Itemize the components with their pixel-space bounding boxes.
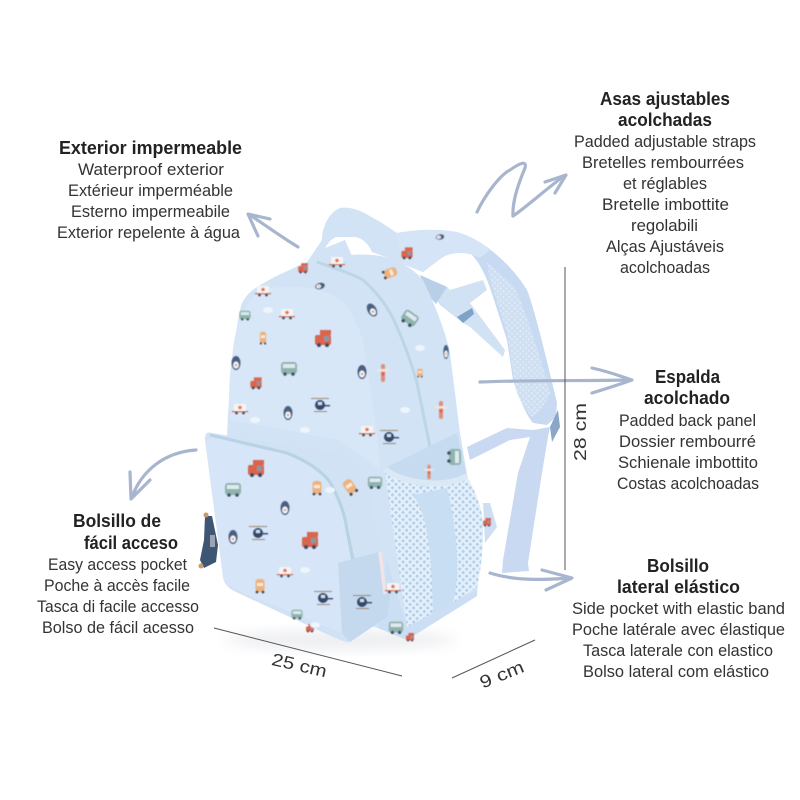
main zipper xyxy=(317,262,430,447)
text block: padded back: Dossier rembourré xyxy=(619,433,756,451)
text block: elastic side pocket: lateral elástico xyxy=(617,577,740,597)
text block: waterproof exterior: Waterproof exterior xyxy=(78,161,225,179)
arrow: exterior xyxy=(248,214,298,247)
dimension: height 28 cm: 28 cm xyxy=(570,403,590,461)
text block: waterproof exterior: Esterno impermeabile xyxy=(71,203,230,221)
bottom side panel xyxy=(378,560,477,640)
text block: padded straps xyxy=(574,89,756,277)
text block: padded straps: acolchadas xyxy=(618,110,712,130)
text block: easy access pocket: Easy access pocket xyxy=(48,556,187,574)
dimension: width 25 cm xyxy=(214,628,402,681)
text block: padded straps: Bretelle imbottite xyxy=(602,196,729,214)
text block: elastic side pocket xyxy=(572,556,785,681)
text block: padded straps: acolchoadas xyxy=(620,259,710,277)
text block: elastic side pocket: Bolsillo xyxy=(647,556,709,576)
arrow: side pocket xyxy=(490,570,572,590)
text block: elastic side pocket: Tasca laterale con elastico xyxy=(583,642,773,660)
keychain charm xyxy=(198,512,218,568)
text block: easy access pocket: Tasca di facile accesso xyxy=(37,598,199,616)
dimension: width 25 cm: 25 cm xyxy=(270,649,329,681)
front panel seam xyxy=(229,287,380,470)
text block: waterproof exterior: Exterior impermeable xyxy=(59,138,242,158)
text block: padded straps: Padded adjustable straps xyxy=(574,133,756,151)
text block: padded straps: Bretelles rembourrées xyxy=(582,154,744,172)
text block: elastic side pocket: Poche latérale avec élastique xyxy=(572,621,785,639)
text block: elastic side pocket: Bolso lateral com elástico xyxy=(583,663,769,681)
side pocket interior xyxy=(385,433,467,487)
text block: padded straps: et réglables xyxy=(623,175,707,193)
text block: waterproof exterior: Extérieur imperméable xyxy=(68,182,233,200)
text block: easy access pocket: Bolso de fácil acesso xyxy=(42,619,194,637)
text block: padded back: Espalda xyxy=(655,367,721,387)
text block: padded straps: Alças Ajustáveis xyxy=(606,238,724,256)
text block: waterproof exterior xyxy=(57,138,242,242)
text block: padded straps: Asas ajustables xyxy=(600,89,730,109)
fabric vehicle print xyxy=(225,234,491,642)
top carry handle xyxy=(305,208,402,265)
shoulder strap with mesh lining xyxy=(397,230,560,573)
side mesh pocket xyxy=(385,469,483,627)
text block: padded straps: regolabili xyxy=(631,217,698,235)
text block: waterproof exterior: Exterior repelente à água xyxy=(57,224,241,242)
text block: easy access pocket: Bolsillo de xyxy=(73,511,161,531)
arrow: front pocket xyxy=(130,450,196,499)
text block: easy access pocket: fácil acceso xyxy=(84,533,178,553)
main body xyxy=(226,255,483,640)
dimension: depth 9 cm: 9 cm xyxy=(477,657,527,692)
text block: padded back: Padded back panel xyxy=(619,412,756,430)
dimension: depth 9 cm xyxy=(452,640,535,692)
text block: padded back: Schienale imbottito xyxy=(618,454,758,472)
front pocket xyxy=(205,433,390,642)
arrow: back panel xyxy=(480,368,632,393)
text block: easy access pocket xyxy=(37,511,199,637)
text block: elastic side pocket: Side pocket with elastic band xyxy=(572,600,785,618)
backpack photo xyxy=(198,208,560,650)
text block: padded back xyxy=(617,367,759,493)
text block: padded back: Costas acolchoadas xyxy=(617,475,759,493)
text block: easy access pocket: Poche à accès facile xyxy=(44,577,190,595)
arrow: straps squiggle xyxy=(477,163,566,216)
text block: padded back: acolchado xyxy=(644,388,730,408)
